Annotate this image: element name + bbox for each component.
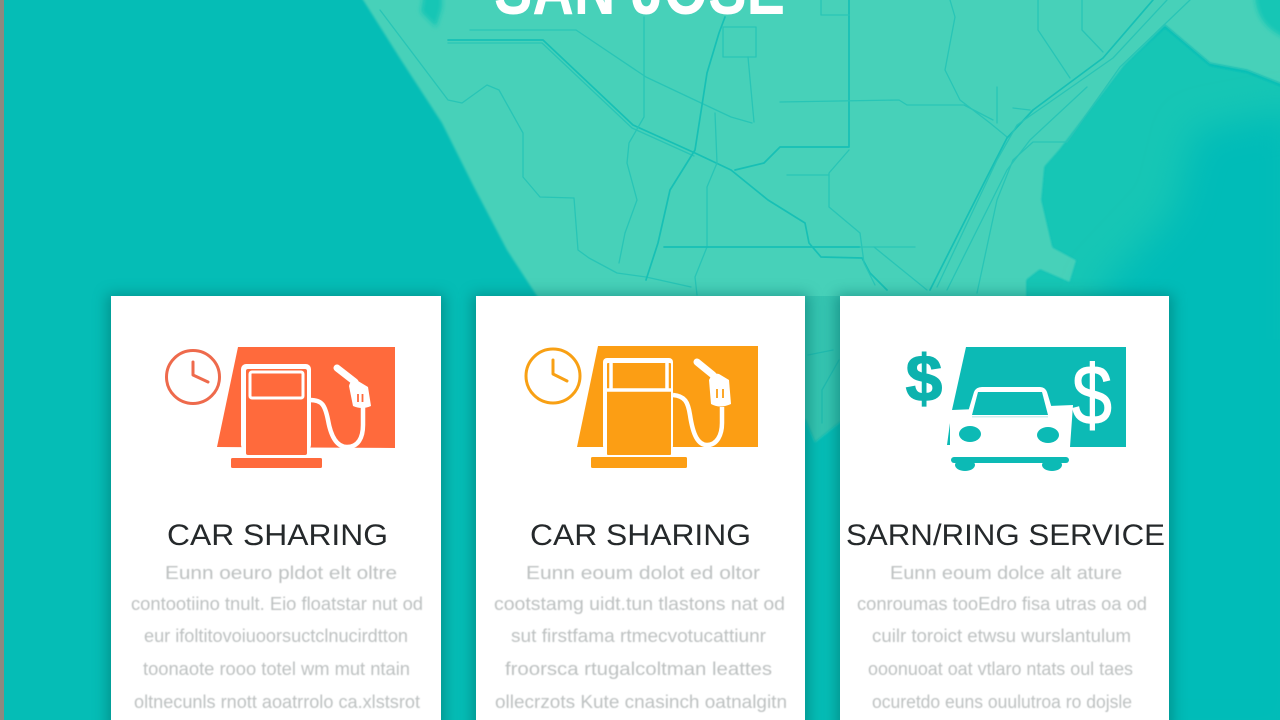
land mass xyxy=(360,0,1280,442)
road network xyxy=(380,0,1280,423)
body text xyxy=(857,563,1147,712)
panel: car sharing (orange) xyxy=(472,294,809,720)
body text: cootstamg uidt.tun tlastons nat od xyxy=(494,594,785,614)
body text xyxy=(131,563,423,712)
heading: SARN/RING SERVICE xyxy=(846,519,1165,552)
backing shape xyxy=(577,346,758,447)
left dollar sign: $ xyxy=(906,341,942,415)
icon: clock and fuel pump xyxy=(526,346,758,468)
icon: dollar signs and car xyxy=(906,341,1126,471)
right dollar sign: $ xyxy=(1072,348,1112,442)
top-right water inlet xyxy=(1255,0,1280,39)
body text: eur ifoltitovoiuoorsuctclnucirdtton xyxy=(144,626,408,646)
deep bay water xyxy=(1100,110,1280,720)
clock xyxy=(526,349,580,403)
backing shape xyxy=(952,347,1126,447)
body text: Eunn oeuro pldot elt oltre xyxy=(165,563,397,583)
bay water xyxy=(1027,28,1280,340)
left edge strip xyxy=(0,0,4,720)
heading: CAR SHARING xyxy=(167,519,388,552)
body text: sut firstfama rtmecvotucattiunr xyxy=(511,626,766,646)
card shadow xyxy=(472,294,809,720)
body text: toonaote rooo totel wm mut ntain xyxy=(143,659,410,679)
body text: cuilr toroict etwsu wurslantulum xyxy=(872,626,1131,646)
body text: froorsca rtugalcoltman leattes xyxy=(505,659,772,679)
body text: conroumas tooEdro fisa utras oa od xyxy=(857,594,1147,614)
car xyxy=(947,387,1070,471)
card shadow xyxy=(836,294,1173,720)
map: San Jose land mass and roads xyxy=(360,0,1280,720)
body text: ooonuoat oat vtlaro ntats oul taes xyxy=(868,659,1133,679)
top-left water inlet xyxy=(421,0,442,27)
body text xyxy=(494,563,787,712)
panel: car sharing (coral) xyxy=(107,294,445,720)
card background xyxy=(111,296,441,720)
clock xyxy=(166,350,220,404)
backing shape xyxy=(217,347,395,448)
card shadow xyxy=(107,294,445,720)
shaded land between cards xyxy=(805,296,840,442)
body text: Eunn eoum dolot ed oltor xyxy=(526,563,760,583)
body text: Eunn eoum dolce alt ature xyxy=(890,563,1122,583)
body text: contootiino tnult. Eio floatstar nut od xyxy=(131,594,423,614)
body text: ollecrzots Kute cnasinch oatnalgitn xyxy=(495,692,787,712)
heading: CAR SHARING xyxy=(530,519,751,552)
pump xyxy=(231,364,371,468)
body text: oltnecunls rnott aoatrrolo ca.xlstsrot xyxy=(134,692,420,712)
card background xyxy=(840,296,1169,720)
pump xyxy=(591,358,731,468)
icon: clock and fuel pump xyxy=(166,347,395,468)
card background xyxy=(476,296,805,720)
panel: sharing service (teal) xyxy=(836,294,1173,720)
body text: ocuretdo euns ouulutroa ro dojsle xyxy=(872,692,1132,712)
